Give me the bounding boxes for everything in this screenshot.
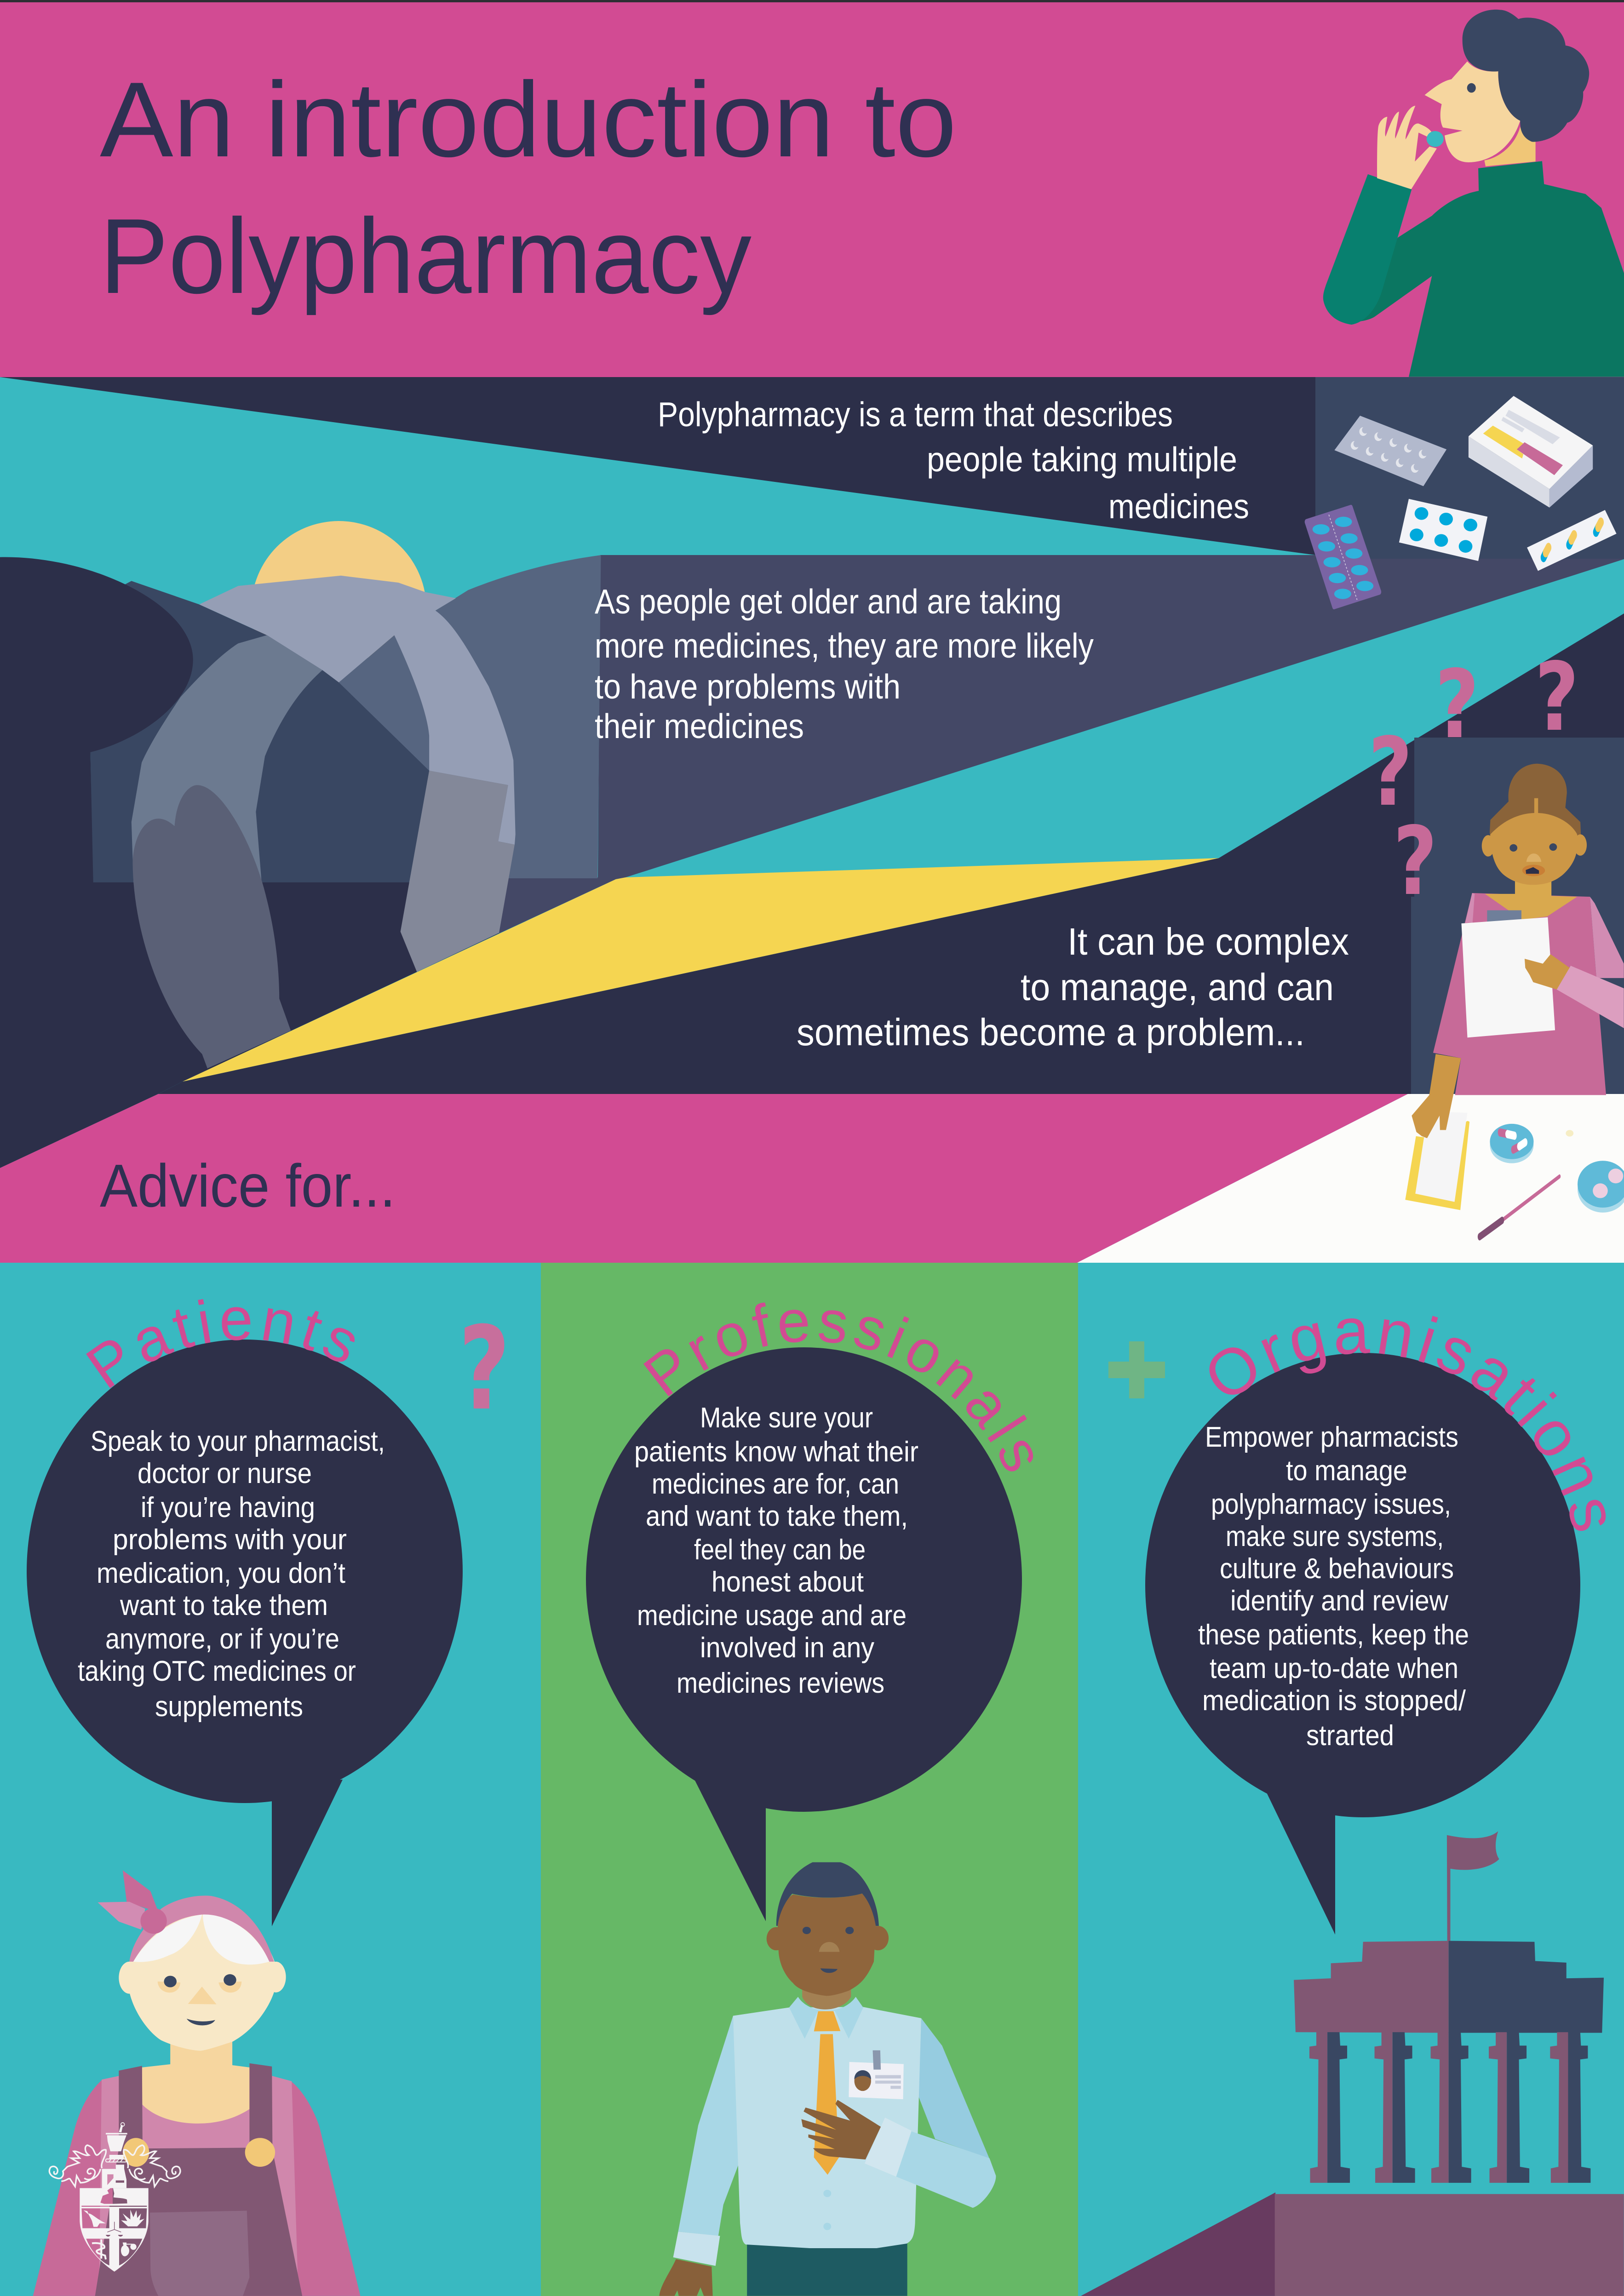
text: complex to manage bbox=[797, 920, 1349, 1054]
upper sleeve bbox=[1590, 897, 1624, 978]
icon: question mark: ? bbox=[459, 1302, 510, 1436]
text: definition: people taking multiple bbox=[927, 440, 1237, 479]
left arm bbox=[132, 635, 322, 882]
text: professionals advice bbox=[634, 1402, 918, 1699]
text: organisations advice: strarted bbox=[1306, 1720, 1394, 1752]
shirt bbox=[733, 2007, 921, 2248]
text: organisations advice: medication is stopped/ bbox=[1202, 1685, 1466, 1717]
panel: organisations column bbox=[1078, 1263, 1624, 2296]
text: professionals advice: and want to take them, bbox=[646, 1500, 908, 1532]
grey blister pack bbox=[1334, 416, 1446, 486]
title bbox=[100, 60, 957, 316]
text: older people: As people get older and are taking bbox=[595, 582, 1062, 621]
dark upper wedge bbox=[0, 377, 1315, 555]
question marks bbox=[1368, 643, 1579, 916]
pill dish large bbox=[1578, 1161, 1624, 1213]
eye bags bbox=[158, 1981, 241, 1993]
sleeve bbox=[1323, 174, 1412, 325]
right back panel bbox=[411, 555, 601, 882]
columns bbox=[1309, 2032, 1590, 2183]
text: complex to manage: to manage, and can bbox=[1021, 966, 1334, 1008]
text: patients advice: if you’re having bbox=[141, 1492, 315, 1523]
tie bbox=[814, 2011, 840, 2175]
left cuff bbox=[673, 2232, 720, 2266]
text: definition: medicines bbox=[1108, 487, 1249, 526]
flag bbox=[1447, 1831, 1499, 1941]
hair bbox=[133, 1914, 269, 1964]
head bbox=[252, 521, 426, 696]
crest logo bbox=[49, 2123, 180, 2272]
text: organisations advice: these patients, keep the bbox=[1198, 1619, 1469, 1651]
cuff bbox=[865, 2118, 912, 2176]
panel: professionals column bbox=[541, 1263, 1078, 2296]
illustration: elderly person seen from behind bbox=[0, 521, 601, 1068]
hair bbox=[1463, 10, 1589, 142]
paper bbox=[1461, 917, 1555, 1037]
crest helm column bbox=[102, 2164, 126, 2188]
back bbox=[41, 581, 436, 882]
collar bbox=[789, 1997, 863, 2038]
navy floor left bbox=[0, 882, 506, 1168]
hair parting bbox=[1534, 798, 1538, 814]
hand bbox=[132, 785, 291, 1068]
eyes bbox=[164, 1974, 236, 1987]
right upper sleeve bbox=[918, 2018, 989, 2159]
crest rope bbox=[106, 2159, 126, 2162]
text: patients advice: medication, you don’t bbox=[97, 1557, 345, 1589]
panel: patients column bbox=[0, 1263, 541, 2296]
ears bbox=[119, 1962, 286, 1994]
illustration: medicines bbox=[1306, 396, 1617, 607]
roof left bbox=[1294, 1941, 1449, 2033]
text: organisations advice: identify and review bbox=[1230, 1585, 1448, 1617]
question marks: ? bbox=[1535, 643, 1579, 752]
text: older people: more medicines, they are more likely bbox=[595, 626, 1094, 665]
purple blister bbox=[1306, 508, 1379, 607]
right sleeve bbox=[401, 771, 515, 972]
text: professionals advice: medicines reviews bbox=[677, 1667, 884, 1699]
nurse panel bbox=[1411, 738, 1624, 1094]
advice band bbox=[0, 1094, 1408, 1263]
text: organisations advice: make sure systems, bbox=[1226, 1521, 1444, 1552]
illustration: building bbox=[1081, 1831, 1624, 2296]
icon: green plus bbox=[1108, 1341, 1165, 1398]
nose bbox=[188, 1987, 217, 2004]
sleeves bbox=[33, 2080, 361, 2296]
shirt bbox=[99, 2065, 298, 2296]
illustration: person taking a pill bbox=[1323, 10, 1624, 377]
eyes bbox=[803, 1927, 854, 1934]
roof right bbox=[1449, 1941, 1604, 2033]
crest foliage right bbox=[124, 2145, 180, 2187]
text: professionals advice: honest about bbox=[712, 1566, 864, 1598]
pill bbox=[1427, 131, 1444, 147]
text: definition bbox=[658, 395, 1249, 526]
headband bbox=[129, 1895, 274, 1962]
navy hair blob bbox=[0, 557, 193, 882]
platform bbox=[1275, 2194, 1624, 2296]
text: patients advice: want to take them bbox=[120, 1590, 328, 1621]
header band bbox=[0, 0, 1624, 377]
medicines panel bbox=[1315, 377, 1624, 559]
mouth bbox=[821, 1969, 838, 1973]
ears bbox=[1482, 834, 1587, 857]
text: older people: their medicines bbox=[595, 707, 804, 745]
question marks: ? bbox=[1368, 718, 1412, 827]
text: complex to manage: sometimes become a problem... bbox=[797, 1011, 1305, 1054]
mouth bbox=[1522, 865, 1545, 876]
eyes bbox=[1509, 843, 1557, 852]
crest shield bbox=[80, 2188, 149, 2272]
nose bbox=[819, 1942, 839, 1952]
text: patients advice: problems with your bbox=[113, 1524, 347, 1556]
speech bubble: professionals bbox=[586, 1347, 1022, 1921]
text: patients advice: Speak to your pharmacist, bbox=[91, 1426, 385, 1457]
white blister with blue pills bbox=[1399, 499, 1487, 561]
crest atomiser bbox=[121, 2243, 137, 2256]
buttons bbox=[123, 2138, 275, 2167]
text: professionals advice: Make sure your bbox=[700, 1402, 873, 1434]
text: patients advice: doctor or nurse bbox=[138, 1458, 312, 1489]
eye bbox=[1467, 83, 1476, 92]
text: organisations advice bbox=[1198, 1421, 1469, 1752]
clipboard bbox=[1405, 1121, 1469, 1210]
platform shadow bbox=[1081, 2193, 1275, 2296]
forearm bbox=[896, 2131, 996, 2208]
title: An introduction to bbox=[100, 60, 957, 179]
text: professionals advice: feel they can be bbox=[694, 1534, 866, 1566]
lower sleeve bbox=[1557, 966, 1624, 1028]
text: patients advice: anymore, or if you’re bbox=[105, 1623, 339, 1655]
text: organisations advice: polypharmacy issues, bbox=[1211, 1489, 1451, 1520]
id badge bbox=[849, 2050, 904, 2099]
speck bbox=[1566, 1130, 1573, 1137]
hand on paper bbox=[1525, 954, 1570, 990]
text: patients advice: supplements bbox=[155, 1691, 303, 1723]
heading: patients: Patients bbox=[75, 1284, 374, 1402]
illustration: patient bbox=[33, 1870, 361, 2296]
heading: advice for: Advice for... bbox=[100, 1152, 396, 1220]
face bbox=[1425, 61, 1520, 162]
text: professionals advice: involved in any bbox=[700, 1632, 874, 1664]
text: organisations advice: to manage bbox=[1286, 1455, 1407, 1487]
text: organisations advice: team up-to-date when bbox=[1210, 1653, 1458, 1684]
bow bbox=[98, 1870, 167, 1934]
dress bbox=[1433, 893, 1606, 1095]
crest stag bbox=[100, 2187, 127, 2204]
table bbox=[1077, 1094, 1624, 1263]
medicine box bbox=[1469, 396, 1593, 508]
hair bbox=[776, 1862, 879, 1926]
shawl bbox=[199, 576, 516, 845]
face bbox=[1490, 813, 1578, 885]
shoulder bbox=[1465, 893, 1475, 922]
left sleeve bbox=[678, 2016, 740, 2236]
capsule strip bbox=[1527, 510, 1617, 571]
speech bubble: organisations bbox=[1145, 1353, 1580, 1935]
crest dove bbox=[84, 2210, 106, 2227]
speech bubble: patients bbox=[27, 1340, 463, 1926]
dungarees bbox=[95, 2063, 302, 2296]
pill dish small bbox=[1490, 1124, 1534, 1163]
crest foliage left bbox=[49, 2145, 106, 2187]
clipboard paper bbox=[1415, 1111, 1468, 1202]
pocket bbox=[150, 2210, 249, 2296]
text: patients advice: taking OTC medicines or bbox=[78, 1655, 356, 1687]
question marks: ? bbox=[1435, 650, 1479, 760]
question marks: ? bbox=[1393, 807, 1437, 916]
pen bbox=[1480, 1176, 1560, 1237]
text: organisations advice: culture & behaviours bbox=[1220, 1553, 1454, 1585]
shirt buttons bbox=[823, 2190, 831, 2230]
heading: organisations: Organisations bbox=[1192, 1294, 1624, 1543]
hand bbox=[1377, 106, 1437, 189]
badge bbox=[1487, 910, 1521, 922]
sweater bbox=[1351, 161, 1624, 377]
trousers bbox=[747, 2243, 907, 2296]
arm and hand bbox=[1412, 1054, 1461, 1138]
text: definition: Polypharmacy is a term that describes bbox=[658, 395, 1173, 434]
text: professionals advice: medicine usage and are bbox=[637, 1600, 907, 1632]
text: older people bbox=[595, 582, 1094, 745]
neck bbox=[1485, 877, 1577, 920]
crest scales bbox=[106, 2222, 123, 2237]
text: organisations advice: Empower pharmacists bbox=[1205, 1421, 1458, 1453]
nose bbox=[1526, 853, 1541, 862]
hair bbox=[1490, 764, 1581, 838]
inner back highlight bbox=[339, 635, 442, 771]
slate panel bbox=[499, 555, 1624, 933]
neck bbox=[1484, 127, 1536, 166]
background: teal base bbox=[0, 377, 1624, 1263]
illustration: confused nurse bbox=[1405, 764, 1624, 1237]
head bbox=[778, 1894, 876, 1996]
left hand bbox=[659, 2259, 713, 2296]
title: Polypharmacy bbox=[100, 197, 752, 316]
text: complex to manage: It can be complex bbox=[1067, 920, 1349, 963]
hand on chest bbox=[801, 2100, 881, 2159]
crest rod and serpent bbox=[92, 2239, 106, 2259]
crest agave bbox=[121, 2210, 144, 2227]
text: patients advice bbox=[78, 1426, 385, 1723]
crest mortar and pestle bbox=[106, 2123, 127, 2159]
neck and chest bbox=[142, 2042, 249, 2124]
mouth bbox=[187, 2019, 215, 2025]
yellow wedge bbox=[183, 858, 1219, 1082]
ears bbox=[767, 1926, 889, 1950]
text: professionals advice: patients know what their bbox=[634, 1436, 918, 1468]
navy lower wedge right bbox=[158, 613, 1624, 1094]
head bbox=[129, 1912, 275, 2051]
text: older people: to have problems with bbox=[595, 667, 901, 706]
text: professionals advice: medicines are for, can bbox=[652, 1468, 899, 1500]
heading: professionals: Professionals bbox=[631, 1286, 1060, 1486]
neck bbox=[802, 1987, 851, 2010]
illustration: professional bbox=[659, 1862, 996, 2296]
